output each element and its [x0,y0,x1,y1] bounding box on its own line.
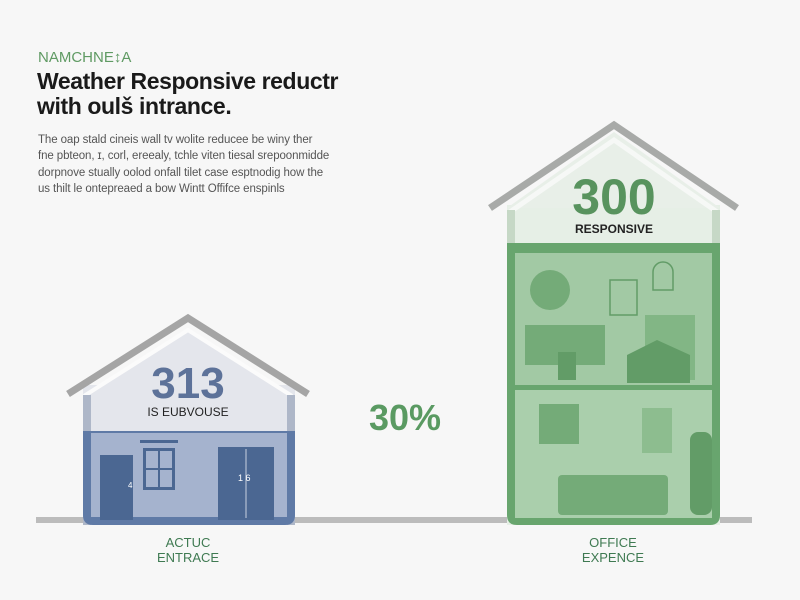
house: left blue: 4 [128,481,133,490]
title: with oulš intrance. [37,93,231,119]
left caption: ACTUC [166,535,210,550]
left caption: ENTRACE [157,550,219,565]
left caption [157,535,219,565]
right caption: EXPENCE [582,550,644,565]
house: right green [490,125,737,525]
body text: fne pbteon, ɪ, corl, ereealy, tchle viten tiesal srepoonmidde [38,150,329,162]
body text: dorpnove stually oolod onfall tilet case esptnodig how the [38,167,323,179]
right sublabel: RESPONSIVE [575,222,653,236]
right caption [582,535,644,565]
body text [38,134,329,195]
house: left blue: 1 6 [238,473,251,483]
left number: 313 [151,359,225,408]
right caption: OFFICE [589,535,637,550]
body text: us thilt le ontepreaed a bow Wintt Offifce enspinls [38,183,285,195]
ground line [36,517,752,523]
title: Weather Responsive reductr [37,68,338,94]
eyebrow label: NAMCHNE↕A [38,49,131,66]
title [37,68,338,119]
furniture [530,270,570,310]
right number: 300 [572,169,656,225]
left sublabel: IS EUBVOUSE [147,405,229,419]
doors and window [100,455,133,520]
body text: The oap stald cineis wall tv wolite reducee be winy ther [38,134,312,146]
middle percentage: 30% [369,397,441,438]
